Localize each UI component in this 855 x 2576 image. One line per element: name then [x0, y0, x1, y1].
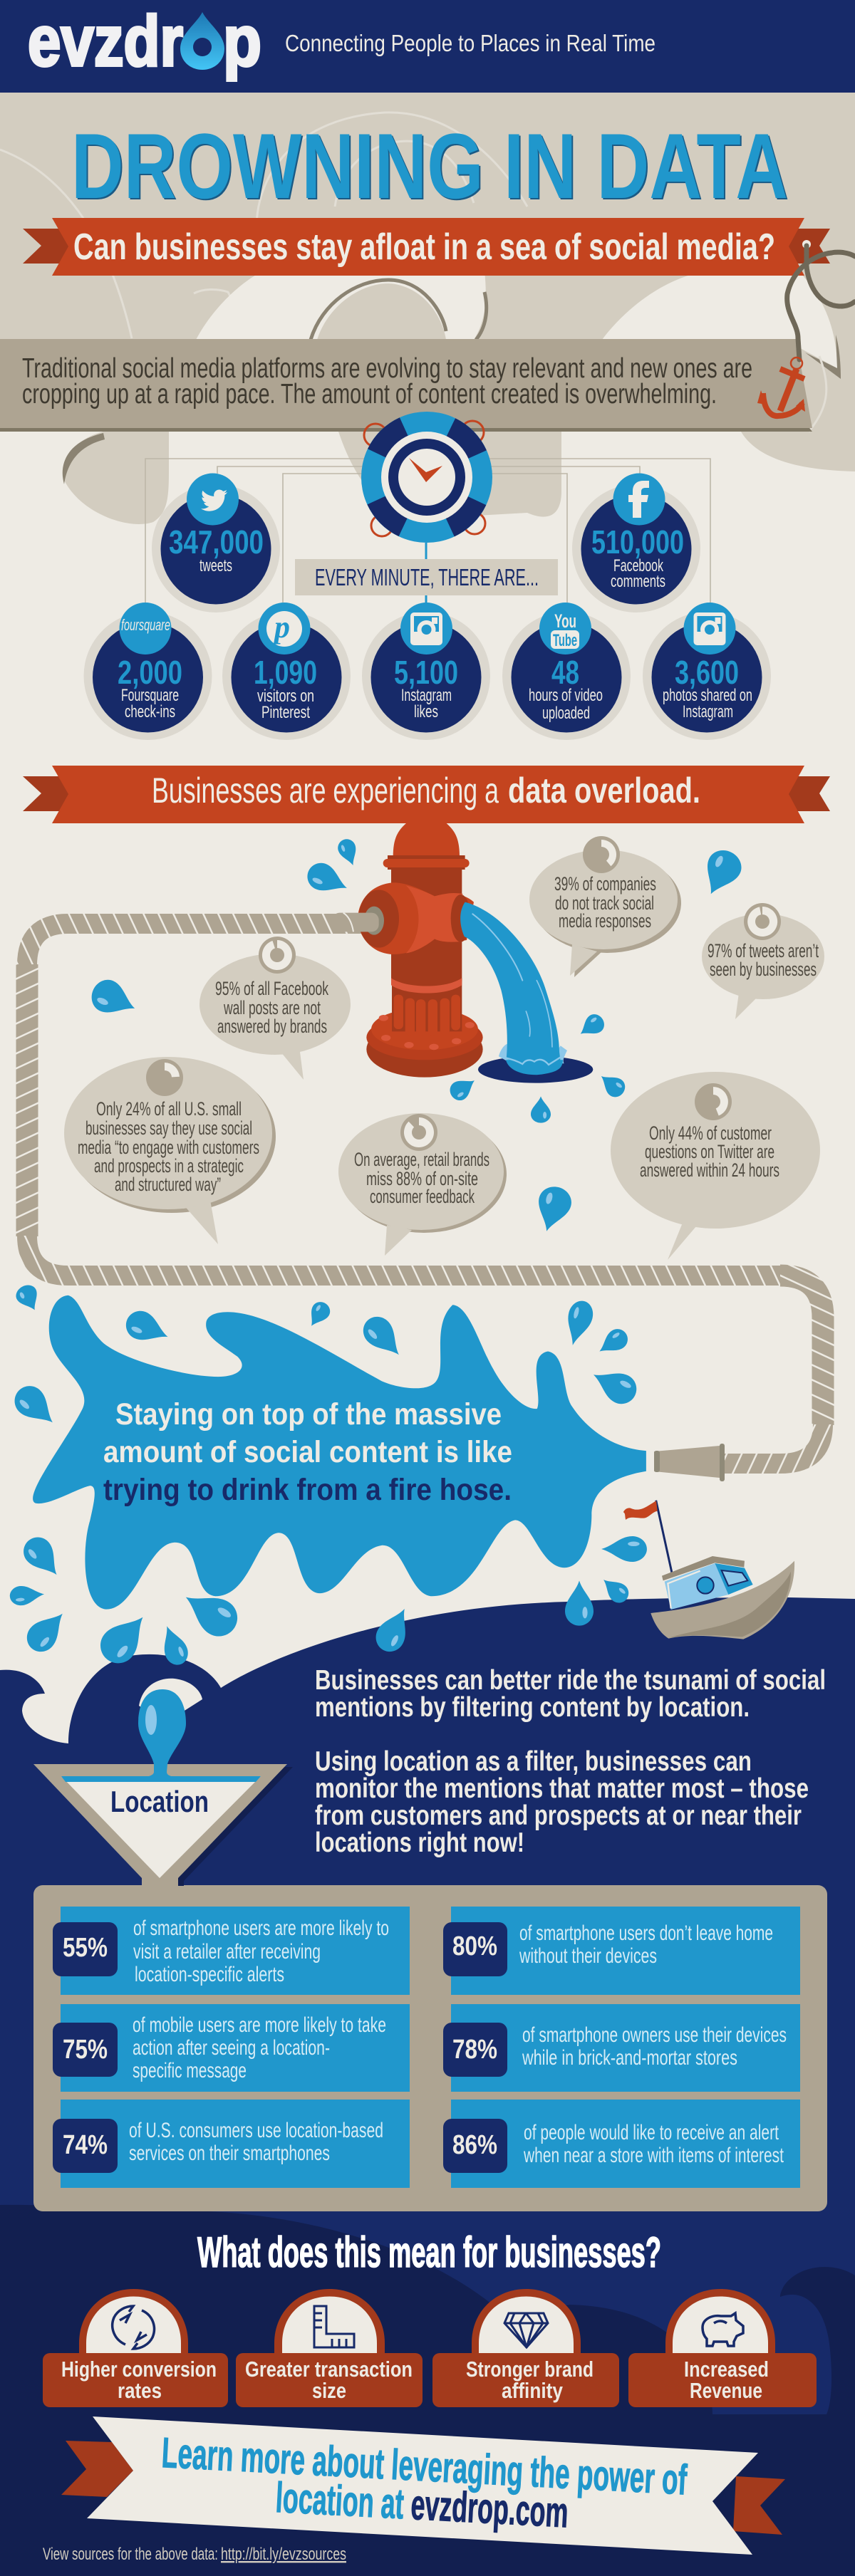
stat card: 75 percent: specific message	[133, 2059, 247, 2082]
stat card: 55 percent: 55%	[63, 1933, 108, 1963]
speech bubble: 39 percent: 39% of companies	[554, 873, 656, 895]
stat: pinterest: 1,090	[254, 654, 317, 691]
speech bubble: 39 percent: media responses	[559, 910, 651, 932]
tagline: Connecting People to Places in Real Time	[285, 30, 656, 56]
ribbon: data overload	[23, 766, 830, 823]
water drops around splash	[9, 1282, 647, 1671]
ribbon: data overload: Businesses are experiencing a	[152, 771, 499, 810]
stat: tweets	[152, 473, 280, 612]
stat: instagram photos: 3,600	[675, 654, 739, 691]
subtitle ribbon	[23, 218, 830, 276]
header bar	[0, 0, 855, 93]
text: ride the tsunami	[315, 1665, 826, 1858]
stat: instagram likes: likes	[414, 702, 438, 721]
connector: ring to caption	[425, 543, 428, 603]
fire hydrant with water stream	[333, 823, 593, 1083]
benefit: stronger brand affinity	[432, 2289, 619, 2407]
boat	[623, 1501, 794, 1639]
caption: every minute: EVERY MINUTE, THERE ARE...	[315, 564, 539, 590]
speech bubble: 44 percent: questions on Twitter are	[645, 1141, 774, 1162]
stat card: 74 percent: of U.S. consumers use location-based	[129, 2119, 383, 2142]
benefit: higher conversion rates	[43, 2289, 228, 2407]
stat: youtube: Tube	[553, 631, 577, 650]
icon: piggy bank	[703, 2313, 743, 2346]
hose nozzle	[654, 1444, 725, 1481]
stat card: 80 percent	[443, 1907, 800, 1995]
stat: pinterest: Pinterest	[261, 703, 310, 722]
water drops around hydrant	[86, 837, 747, 1236]
evzdrop logo: p	[223, 1, 261, 81]
splash message: trying to drink from a fire hose.	[103, 1473, 512, 1507]
speech bubble: 97 percent	[702, 903, 824, 1019]
stat: instagram likes: 5,100	[394, 654, 458, 691]
icon: diamond	[504, 2313, 548, 2347]
stat card: 75 percent: of mobile users are more likely to take	[133, 2013, 386, 2037]
fire hose rope	[27, 924, 823, 1464]
stat: instagram photos	[643, 603, 771, 740]
speech bubble: 24 percent: and structured way”	[115, 1174, 221, 1195]
speech bubble: 95 percent: wall posts are not	[223, 997, 321, 1018]
stat: instagram photos: photos shared on	[663, 686, 752, 705]
stat card: 80 percent: 80%	[452, 1931, 497, 1961]
speech bubble: 24 percent: businesses say they use social	[86, 1117, 252, 1139]
funnel with location label: Location	[110, 1785, 209, 1818]
stat: youtube	[502, 603, 631, 740]
stat card: 78 percent	[443, 2004, 800, 2092]
stat: tweets: tweets	[200, 556, 232, 575]
icon: life ring clock	[361, 412, 492, 543]
benefit: greater transaction size: size	[312, 2378, 346, 2403]
speech bubble: 88 percent: miss 88% of on-site	[366, 1168, 478, 1189]
call to action ribbon: location at	[274, 2473, 405, 2528]
speech bubble: 24 percent: and prospects in a strategic	[94, 1155, 244, 1177]
caption: every minute	[295, 559, 558, 595]
call to action ribbon	[61, 2416, 785, 2555]
sources footer: View sources for the above data:	[43, 2545, 218, 2564]
speech bubble: 88 percent	[338, 1113, 507, 1256]
stat: foursquare: check-ins	[125, 702, 175, 721]
stat: instagram photos: Instagram	[683, 702, 733, 721]
speech bubble: 44 percent: answered within 24 hours	[640, 1159, 779, 1181]
icon: anchor and rope	[757, 240, 855, 416]
splash of water	[33, 1295, 646, 1610]
speech bubble: 39 percent: do not track social	[555, 892, 654, 914]
speech bubble: 95 percent: answered by brands	[217, 1016, 327, 1037]
icon: ruler	[314, 2306, 354, 2347]
speech bubble: 95 percent: 95% of all Facebook	[215, 978, 328, 999]
stat card: 78 percent: 78%	[452, 2035, 497, 2065]
stat card: 80 percent: without their devices	[519, 1944, 657, 1968]
stat: youtube: You	[554, 610, 576, 632]
stat: facebook comments: comments	[611, 572, 665, 591]
stat card: 86 percent: 86%	[452, 2130, 497, 2160]
stat: youtube: 48	[551, 654, 579, 691]
stat: pinterest: visitors on	[257, 687, 314, 706]
stat: pinterest: p	[271, 610, 290, 645]
stats panel	[33, 1885, 827, 2211]
funnel with location label	[33, 1689, 293, 1886]
speech bubble: 95 percent	[200, 937, 351, 1080]
connector lines	[145, 459, 710, 603]
speech bubble: 88 percent: consumer feedback	[370, 1186, 475, 1207]
stat card: 86 percent	[443, 2100, 800, 2188]
stat: tweets: 347,000	[169, 523, 264, 560]
stat card: 55 percent	[53, 1907, 410, 1995]
speech bubble: 24 percent: Only 24% of all U.S. small	[96, 1098, 242, 1120]
speech bubble: 39 percent	[529, 836, 681, 977]
speech bubble: 44 percent: Only 44% of customer	[649, 1122, 772, 1144]
evzdrop logo: evzdr	[28, 1, 183, 81]
stat: facebook comments: Facebook	[613, 556, 664, 575]
stat card: 74 percent	[53, 2100, 410, 2188]
splash message: amount of social content is like	[103, 1435, 512, 1469]
splash message	[103, 1397, 512, 1507]
icon: conversion arrows	[113, 2306, 154, 2349]
stat card: 75 percent: action after seeing a location-	[133, 2036, 330, 2060]
splash message: Staying on top of the massive	[115, 1397, 502, 1432]
speech bubble: 88 percent: On average, retail brands	[354, 1149, 489, 1170]
text: ride the tsunami: locations right now!	[315, 1827, 524, 1858]
call to action ribbon: evzdrop.com	[410, 2481, 569, 2536]
speech bubble: 24 percent	[64, 1057, 276, 1244]
crest foam	[139, 1679, 202, 1724]
stat card: 74 percent: services on their smartphones	[129, 2142, 330, 2165]
benefit: higher conversion rates: Higher conversion	[61, 2357, 217, 2382]
stat: foursquare: foursquare	[121, 616, 170, 634]
speech bubble: 44 percent	[611, 1072, 820, 1260]
stat: instagram likes	[362, 603, 490, 740]
speech bubble: 24 percent: media “to engage with customers	[78, 1137, 259, 1158]
stat card: 55 percent: of smartphone users are more likely to	[133, 1917, 389, 1940]
stat: pinterest	[222, 603, 351, 740]
benefit: greater transaction size	[236, 2289, 423, 2407]
stat: foursquare: Foursquare	[121, 686, 179, 705]
benefit: higher conversion rates: rates	[118, 2378, 162, 2403]
benefit: increased revenue: Increased	[684, 2357, 769, 2382]
stat: instagram likes: Instagram	[401, 686, 452, 705]
stat card: 75 percent	[53, 2004, 410, 2092]
lower wave background	[0, 2194, 855, 2576]
top background with wave shapes	[0, 93, 855, 524]
stat: foursquare: 2,000	[118, 654, 182, 691]
sources footer: http://bit.ly/evzsources	[221, 2545, 346, 2564]
stat: youtube: uploaded	[542, 704, 590, 723]
stat card: 55 percent: location-specific alerts	[135, 1963, 284, 1986]
stat: foursquare	[84, 603, 212, 740]
benefit: stronger brand affinity: affinity	[502, 2378, 564, 2403]
benefit: greater transaction size: Greater transaction	[245, 2357, 413, 2382]
stat: facebook comments	[572, 473, 700, 612]
ribbon: data overload: data overload.	[508, 771, 700, 810]
benefit: stronger brand affinity: Stronger brand	[466, 2357, 594, 2382]
stat: youtube: hours of video	[529, 686, 603, 705]
stat card: 75 percent: 75%	[63, 2035, 108, 2065]
stat card: 74 percent: 74%	[63, 2130, 108, 2160]
text: ride the tsunami: mentions by filtering content by location.	[315, 1692, 750, 1723]
benefit: increased revenue: Revenue	[690, 2378, 762, 2403]
intro band	[0, 339, 812, 432]
stat card: 55 percent: visit a retailer after receiving	[133, 1940, 321, 1964]
text: ride the tsunami: Using location as a filter, businesses can	[315, 1746, 752, 1777]
benefit: increased revenue	[628, 2289, 817, 2407]
stat card: 78 percent: while in brick-and-mortar stores	[522, 2046, 737, 2070]
navy sea with waves	[0, 1597, 855, 2208]
stat: facebook comments: 510,000	[591, 523, 684, 560]
